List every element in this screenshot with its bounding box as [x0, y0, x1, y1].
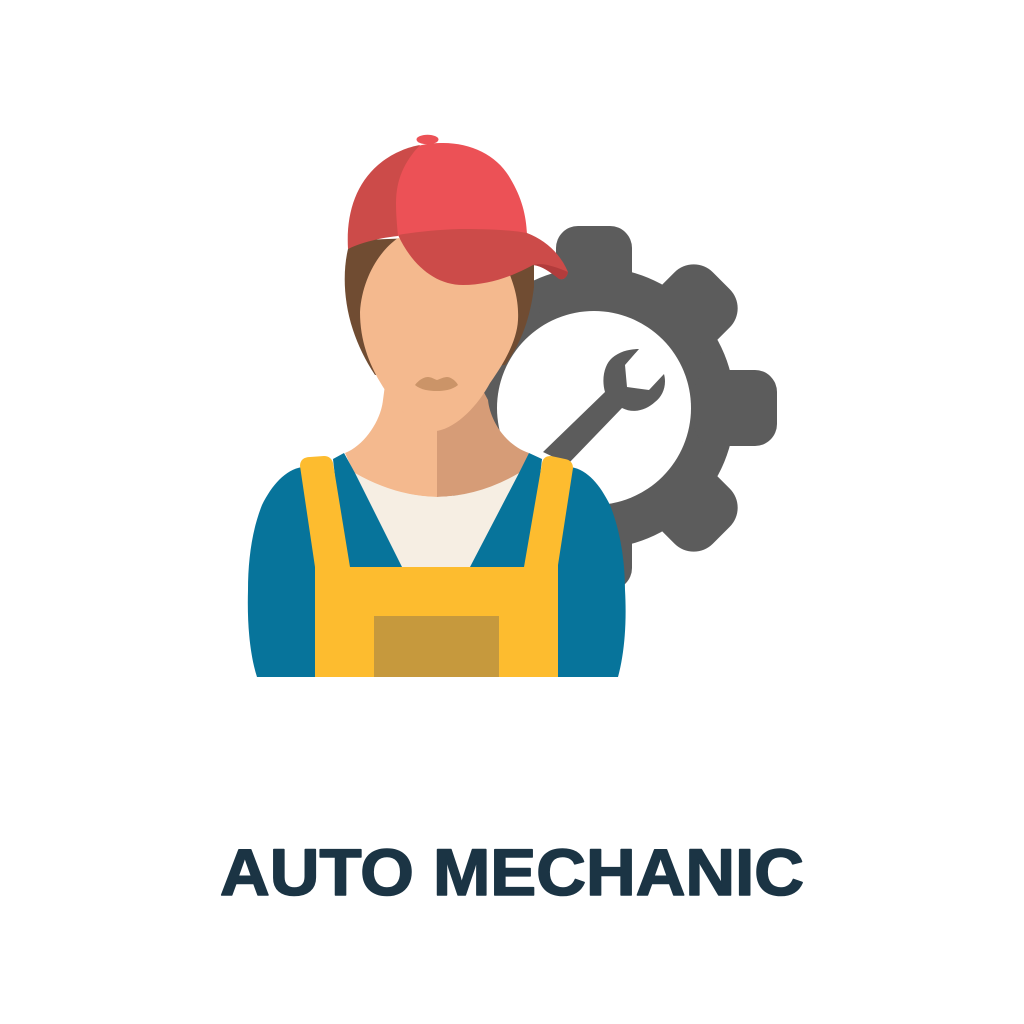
- face: [360, 238, 518, 431]
- cap button: [416, 135, 438, 144]
- mouth: [415, 377, 458, 391]
- icon: gear with wrench: [411, 226, 777, 590]
- left sleeve: [248, 467, 316, 677]
- cap brim underside: [533, 264, 568, 279]
- right sleeve: [557, 467, 626, 677]
- gear teeth: [411, 226, 777, 590]
- gear centre hole: [497, 311, 691, 505]
- title: AUTO MECHANIC: [220, 835, 804, 909]
- shirt: [355, 473, 519, 567]
- left collar: [333, 453, 402, 567]
- mechanic figure: [248, 135, 626, 677]
- cap left panel: [348, 145, 420, 249]
- cap brim: [398, 229, 568, 285]
- neck shadow: [437, 385, 529, 497]
- hair: [345, 235, 534, 375]
- cap crown: [385, 143, 527, 238]
- right collar: [470, 453, 542, 567]
- overalls pocket: [374, 616, 499, 677]
- icon: wrench: [543, 349, 665, 464]
- overalls: [300, 456, 573, 677]
- neck: [345, 385, 437, 497]
- gear ring: [453, 267, 735, 549]
